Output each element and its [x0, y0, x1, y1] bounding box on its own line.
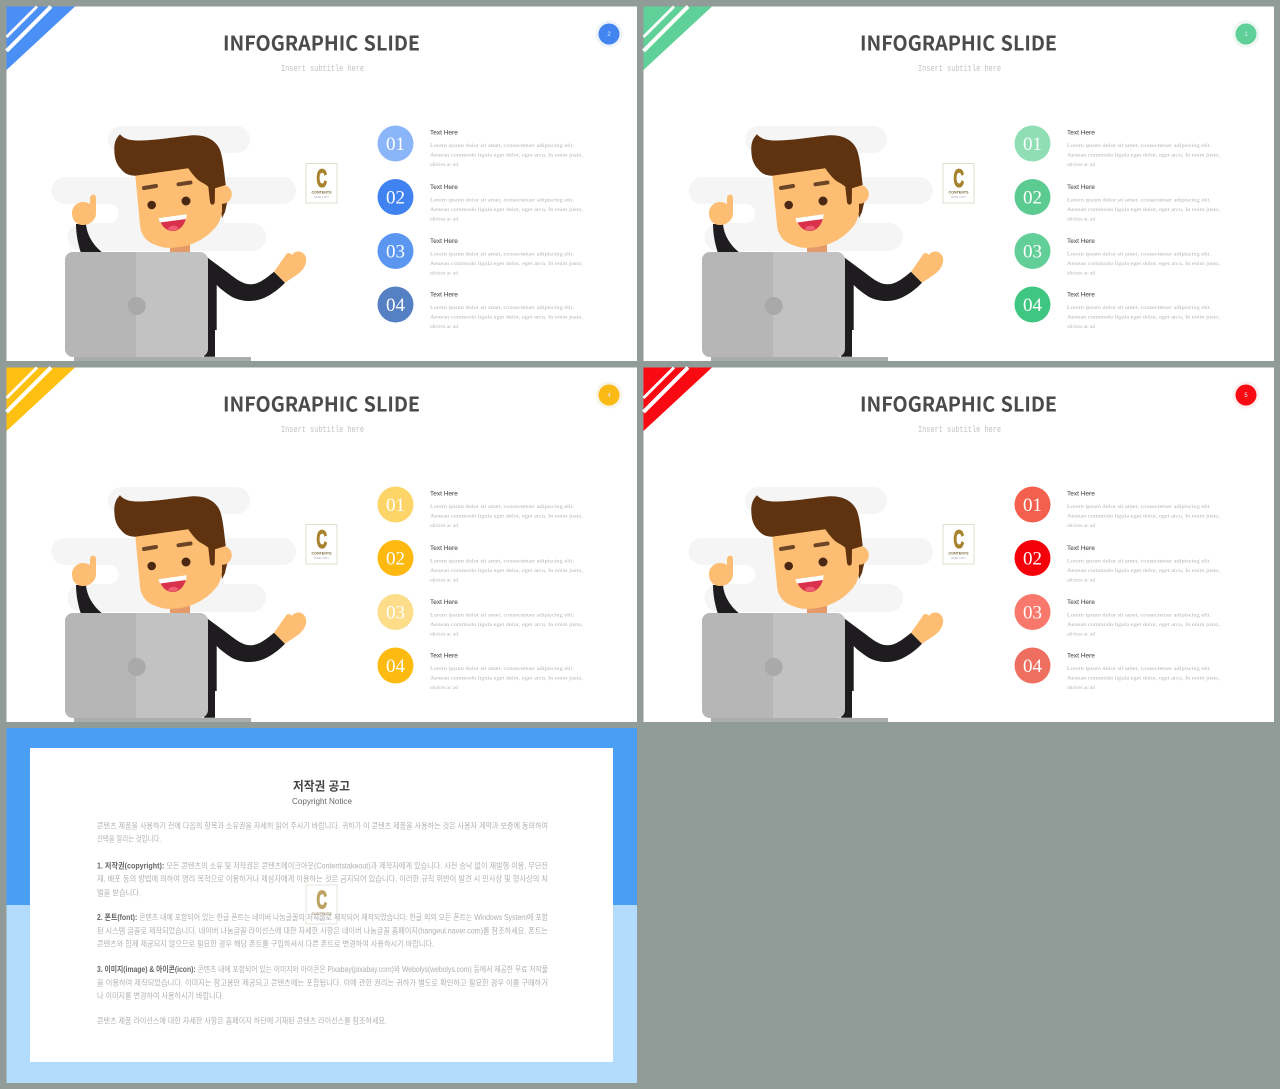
text block 03 — [430, 599, 584, 638]
number badge 02: 02 — [386, 548, 405, 570]
logo: MADE COPY — [951, 196, 966, 199]
text block 04 — [430, 292, 584, 330]
number badge 04: 04 — [386, 295, 406, 316]
logo watermark: CONTENTS — [312, 911, 332, 916]
clause 1: 1. 저작권(copyright): 모든 콘텐츠의 소유 및 저작권은 콘텐츠메이크아웃(Contentstakeout)과 제작자에게 있습니다. 사전 승낙 없이 재발행 이용, 무단전 — [97, 860, 548, 870]
number badge 03: 03 — [386, 242, 405, 262]
illustration: man with laptop — [52, 487, 306, 722]
title: INFOGRAPHIC SLIDE — [223, 26, 420, 56]
text block 01: Lorem ipsum dolor sit amet, consectetuer adipiscing elit. — [1067, 143, 1212, 149]
logo watermark: MADE COPY — [314, 918, 329, 920]
number badge 02 — [378, 540, 414, 576]
text block 03 — [1067, 599, 1221, 638]
logo watermark: C — [316, 886, 327, 914]
subtitle: Insert subtitle here — [918, 425, 1001, 435]
number badge 04 — [1014, 648, 1050, 684]
text block 03: ultrices ac ad — [1067, 632, 1095, 638]
illustration: man with laptop — [688, 487, 943, 722]
logo: CONTENTS — [948, 550, 969, 556]
corner ribbon — [644, 6, 712, 70]
logo watermark — [306, 885, 337, 924]
subtitle: Insert subtitle here — [918, 64, 1001, 74]
text block 02: ultrices ac ad — [1067, 578, 1095, 584]
text block 04: Aenean commodo ligula eget dolor, eget arcu, In enim justo, — [430, 676, 584, 682]
text block 01 — [1067, 490, 1221, 529]
illustration: man with laptop — [688, 126, 943, 361]
page badge: 1 — [1244, 32, 1248, 38]
page badge — [1232, 20, 1260, 48]
text block 03: Aenean commodo ligula eget dolor, eget arcu, In enim justo, — [1067, 622, 1221, 628]
text block 03: Text Here — [1067, 599, 1095, 606]
text block 01: Text Here — [430, 130, 458, 136]
logo: C — [954, 526, 964, 554]
closing note: 콘텐츠 제품 라이선스에 대한 자세한 사항은 홈페이지 하단에 기재된 콘텐츠 라이선스를 참조하세요. — [97, 1016, 387, 1026]
text block 03: ultrices ac ad — [430, 632, 458, 638]
text block 04: Aenean commodo ligula eget dolor, eget arcu, In enim justo, — [430, 314, 584, 320]
number badge 03 — [378, 594, 414, 630]
number badge 04 — [378, 286, 414, 322]
text block 04: Lorem ipsum dolor sit amet, consectetuer adipiscing elit. — [430, 666, 575, 672]
clause 1: 벌을 받습니다. — [97, 888, 141, 898]
text block 02: Aenean commodo ligula eget dolor, eget arcu, In enim justo, — [430, 568, 584, 574]
text block 04 — [1067, 292, 1221, 330]
number badge 03 — [378, 233, 414, 269]
text block 01: Aenean commodo ligula eget dolor, eget arcu, In enim justo, — [1067, 514, 1221, 520]
text block 03: Text Here — [430, 599, 458, 606]
number badge 02: 02 — [1023, 548, 1042, 570]
text block 04: Lorem ipsum dolor sit amet, consectetuer adipiscing elit. — [1067, 666, 1212, 672]
text block 01: Text Here — [1067, 130, 1095, 136]
logo: C — [316, 526, 327, 554]
number badge 04 — [378, 648, 414, 684]
text block 03: Lorem ipsum dolor sit amet, consectetuer adipiscing elit. — [430, 612, 575, 618]
text block 04: Text Here — [1067, 292, 1095, 298]
text block 01: Aenean commodo ligula eget dolor, eget arcu, In enim justo, — [430, 514, 584, 520]
number badge 02 — [1014, 179, 1050, 215]
text block 01: ultrices ac ad — [1067, 162, 1095, 168]
intro paragraph: 선택을 알리는 것입니다. — [97, 834, 161, 844]
clause 2: 된 시스템 글꼴로 제작되었습니다. 네이버 나눔글꼴 라이선스에 대한 자세한 사항은 네이버 나눔글꼴 홈페이지(hangeul.naver.com)를 참조하세요. 폰트는 — [97, 926, 548, 936]
text block 03: ultrices ac ad — [1067, 270, 1095, 276]
logo: MADE COPY — [951, 557, 966, 560]
number badge 03 — [1014, 233, 1050, 269]
text block 04: Aenean commodo ligula eget dolor, eget arcu, In enim justo, — [1067, 676, 1221, 682]
logo: CONTENTS — [948, 190, 969, 194]
number badge 03: 03 — [1023, 602, 1042, 624]
clause 1 — [97, 860, 548, 898]
logo — [306, 524, 337, 564]
panel: slide 2 green — [644, 6, 1274, 361]
text block 03 — [430, 238, 584, 276]
notice subheading: Copyright Notice — [292, 796, 352, 806]
clause 2: 2. 폰트(font): 콘텐츠 내에 포함되어 있는 한글 폰트는 네이버 나눔글꼴의 저작물로 제작되어 제작되었습니다. 한글 외의 모든 폰트는 Windows System에 포함 — [97, 912, 549, 922]
text block 04: Lorem ipsum dolor sit amet, consectetuer adipiscing elit. — [1067, 305, 1212, 311]
logo: CONTENTS — [312, 550, 332, 556]
clause 3: 을 이용하여 제작되었습니다. 이미지는 참고용만 제공되고 콘텐츠에는 포함됩니다. 이에 관한 권리는 귀하가 별도로 확인하고 필요한 경우 이를 구매하거 — [97, 978, 548, 988]
text block 02: Lorem ipsum dolor sit amet, consectetuer adipiscing elit. — [430, 198, 575, 204]
text block 03: Text Here — [430, 238, 458, 245]
text block 01: Aenean commodo ligula eget dolor, eget arcu, In enim justo, — [430, 152, 584, 158]
text block 04 — [1067, 652, 1221, 691]
page badge — [596, 20, 622, 48]
text block 01: Text Here — [1067, 490, 1095, 498]
text block 03 — [1067, 238, 1221, 276]
panel: slide 1 blue — [6, 6, 637, 361]
text block 03: Lorem ipsum dolor sit amet, consectetuer adipiscing elit. — [1067, 252, 1212, 258]
clause 3: 나 이미지를 변경하여 사용하시기 바랍니다. — [97, 990, 224, 1000]
text block 04: ultrices ac ad — [1067, 324, 1095, 330]
text block 03: Aenean commodo ligula eget dolor, eget arcu, In enim justo, — [430, 261, 584, 267]
page badge: 4 — [607, 393, 611, 399]
panel: slide 3 yellow — [6, 368, 637, 722]
number badge 01 — [1014, 126, 1050, 162]
text block 01: Aenean commodo ligula eget dolor, eget arcu, In enim justo, — [1067, 152, 1221, 158]
number badge 01 — [378, 126, 414, 162]
number badge 03 — [1014, 594, 1050, 630]
clause 3 — [97, 964, 548, 1000]
corner ribbon — [6, 6, 75, 70]
number badge 04: 04 — [386, 656, 406, 677]
text block 02 — [1067, 184, 1221, 222]
subtitle: Insert subtitle here — [281, 64, 364, 74]
number badge 04: 04 — [1023, 295, 1042, 316]
text block 04: Lorem ipsum dolor sit amet, consectetuer adipiscing elit. — [430, 305, 575, 311]
text block 02: Aenean commodo ligula eget dolor, eget arcu, In enim justo, — [430, 207, 584, 213]
text block 04: ultrices ac ad — [1067, 685, 1095, 691]
text block 01 — [430, 130, 584, 168]
number badge 01: 01 — [1023, 134, 1042, 155]
notice heading: 저작권 공고 — [293, 778, 350, 794]
page badge — [596, 382, 622, 408]
text block 04: Text Here — [430, 652, 458, 660]
text block 02: Text Here — [430, 184, 458, 191]
number badge 02: 02 — [1023, 188, 1042, 208]
text block 04: Text Here — [430, 292, 458, 298]
title: INFOGRAPHIC SLIDE — [860, 26, 1057, 56]
logo: MADE COPY — [314, 557, 329, 560]
number badge 01 — [378, 486, 414, 522]
clause 2: 콘텐츠와 함께 제공되지 않으므로 필요한 경우 해당 폰트를 구입하셔서 다른 폰트로 변경하여 사용하시기 바랍니다. — [97, 938, 434, 948]
number badge 01: 01 — [1023, 495, 1042, 516]
number badge 04 — [1014, 286, 1050, 322]
illustration: man with laptop — [52, 126, 306, 361]
corner ribbon — [644, 368, 712, 431]
number badge 01: 01 — [386, 134, 405, 155]
logo — [943, 524, 974, 564]
corner ribbon — [6, 368, 75, 431]
text block 03: Lorem ipsum dolor sit amet, consectetuer adipiscing elit. — [430, 252, 575, 258]
intro paragraph — [97, 820, 548, 844]
logo — [943, 164, 974, 203]
page badge: 2 — [607, 32, 611, 38]
text block 03: Lorem ipsum dolor sit amet, consectetuer adipiscing elit. — [1067, 612, 1212, 618]
panel: slide 4 red — [644, 368, 1274, 722]
text block 02: ultrices ac ad — [430, 216, 458, 222]
text block 01: ultrices ac ad — [430, 162, 458, 168]
text block 01 — [1067, 130, 1221, 168]
text block 02 — [1067, 545, 1221, 584]
text block 03: Text Here — [1067, 238, 1095, 245]
text block 02: Aenean commodo ligula eget dolor, eget arcu, In enim justo, — [1067, 207, 1221, 213]
text block 01 — [430, 490, 584, 529]
logo: MADE COPY — [314, 196, 329, 199]
text block 04 — [430, 652, 584, 691]
number badge 03: 03 — [1023, 242, 1042, 262]
number badge 01: 01 — [386, 495, 405, 516]
text block 01: Lorem ipsum dolor sit amet, consectetuer adipiscing elit. — [1067, 504, 1212, 510]
text block 02: Lorem ipsum dolor sit amet, consectetuer adipiscing elit. — [1067, 558, 1212, 564]
number badge 01 — [1014, 486, 1050, 522]
text block 02: Aenean commodo ligula eget dolor, eget arcu, In enim justo, — [1067, 568, 1221, 574]
text block 04: Text Here — [1067, 652, 1095, 660]
text block 01: ultrices ac ad — [1067, 523, 1095, 529]
page badge — [1232, 382, 1260, 408]
text block 02: Text Here — [1067, 545, 1095, 552]
text block 01: Lorem ipsum dolor sit amet, consectetuer adipiscing elit. — [430, 143, 575, 149]
clause 2 — [97, 912, 549, 948]
logo: C — [316, 165, 327, 193]
text block 02: Lorem ipsum dolor sit amet, consectetuer adipiscing elit. — [430, 558, 575, 564]
logo: CONTENTS — [312, 190, 332, 194]
text block 04: Aenean commodo ligula eget dolor, eget arcu, In enim justo, — [1067, 314, 1221, 320]
text block 01: Text Here — [430, 490, 458, 498]
number badge 02 — [378, 179, 414, 215]
number badge 03: 03 — [386, 602, 405, 624]
text block 02: Text Here — [1067, 184, 1095, 191]
logo — [306, 164, 337, 203]
text block 01: ultrices ac ad — [430, 523, 458, 529]
text block 02 — [430, 184, 584, 222]
subtitle: Insert subtitle here — [281, 425, 364, 435]
clause 3: 3. 이미지(image) & 아이콘(icon): 콘텐츠 내에 포함되어 있는 이미지와 아이콘은 Pixabay(pixabay.com)와 Webolys(webolys.com) 등에서 제공한 무료 저작물 — [97, 964, 548, 974]
page badge: 5 — [1244, 393, 1248, 399]
title: INFOGRAPHIC SLIDE — [223, 388, 420, 418]
number badge 02: 02 — [386, 188, 405, 208]
text block 02 — [430, 545, 584, 584]
text block 02: ultrices ac ad — [430, 578, 458, 584]
text block 03: ultrices ac ad — [430, 270, 458, 276]
text block 04: ultrices ac ad — [430, 685, 458, 691]
title: INFOGRAPHIC SLIDE — [860, 388, 1057, 418]
text block 02: Lorem ipsum dolor sit amet, consectetuer adipiscing elit. — [1067, 198, 1212, 204]
logo: C — [954, 165, 964, 193]
text block 02: ultrices ac ad — [1067, 216, 1095, 222]
number badge 04: 04 — [1023, 656, 1042, 677]
text block 04: ultrices ac ad — [430, 324, 458, 330]
text block 03: Aenean commodo ligula eget dolor, eget arcu, In enim justo, — [430, 622, 584, 628]
text block 01: Lorem ipsum dolor sit amet, consectetuer adipiscing elit. — [430, 504, 575, 510]
panel: copyright notice — [6, 728, 637, 1083]
intro paragraph: 콘텐츠 제품을 사용하기 전에 다음의 항목과 소유권을 자세히 읽어 주시기 바랍니다. 귀하가 이 콘텐츠 제품을 사용하는 것은 사용자 계약과 보증에 동의하여 — [97, 820, 548, 830]
text block 02: Text Here — [430, 545, 458, 552]
clause 1: 재, 배포 등의 방법에 의하여 영리 목적으로 이용하거나 제삼자에게 이용하는 것은 금지되어 있습니다. 이러한 규칙 위반이 발견 시 민사상 및 형사상의 처 — [97, 874, 548, 884]
text block 03: Aenean commodo ligula eget dolor, eget arcu, In enim justo, — [1067, 261, 1221, 267]
number badge 02 — [1014, 540, 1050, 576]
